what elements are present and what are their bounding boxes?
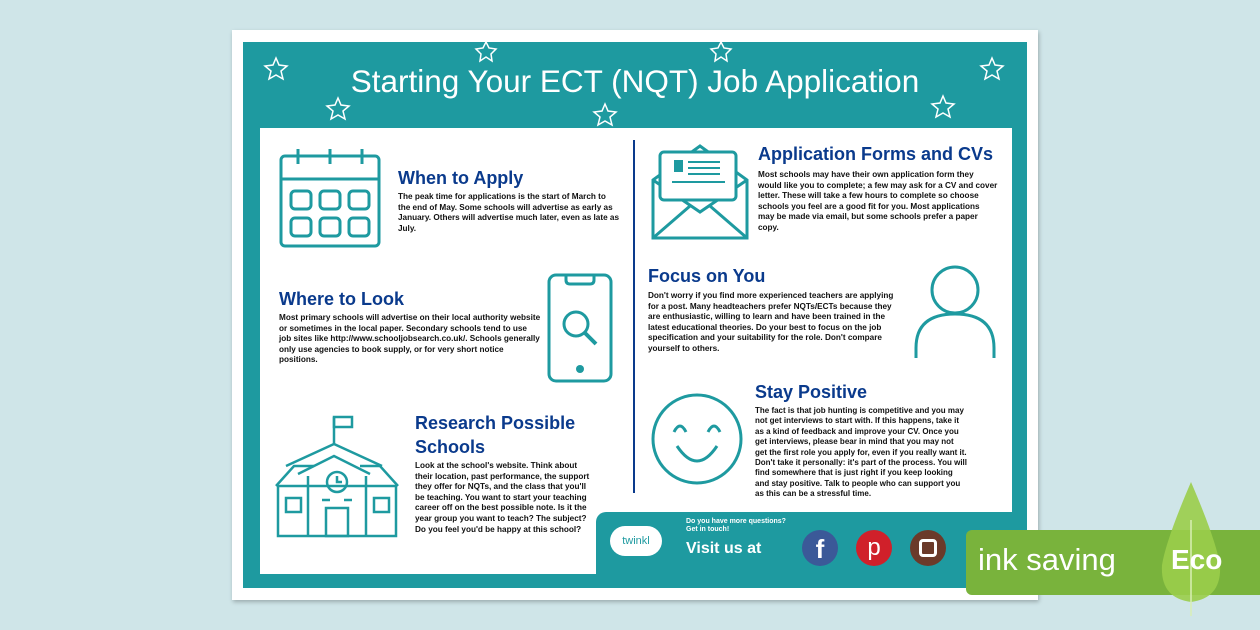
title: Starting Your ECT (NQT) Job Application [351, 63, 919, 99]
text: where to look: Most primary schools will advertise on their local authority website or sometimes in the local paper. Secondary schools tend to use job sites like http://www.schooljobsearch.co.uk/. Schools generally only use agencies to book supply, or for very short notice positions. [279, 313, 540, 364]
column divider [633, 140, 635, 493]
heading: Research Possible Schools: Research Possible Schools [415, 413, 575, 457]
eco badge: ink saving [978, 542, 1116, 577]
white content panel [260, 128, 1012, 574]
footer bar [596, 512, 1027, 588]
eco badge [966, 482, 1260, 616]
text: when to apply: The peak time for applications is the start of March to the end of May. Some schools will advertise as early as January. Others will advertise much later, even as late as July. [398, 192, 619, 233]
social icons [802, 530, 946, 566]
paper sheet [232, 30, 1038, 600]
footer: contact text: Get in touch! [686, 526, 729, 533]
social icons: f [816, 534, 824, 564]
footer: twinkl logo [610, 526, 662, 556]
footer: twinkl logo: twinkl [622, 535, 650, 547]
icon: phone search [548, 274, 612, 382]
eco badge: Eco [1171, 544, 1222, 575]
text: stay positive: The fact is that job hunting is competitive and you may not get interviews to start with. If this happens, take it as a kind of feedback and improve your CV. Once you get interviews, please bear in mind that you may not get the first role you apply for, even if you really want it. Don't take it personally: it's part of the process. You will find somewhere that is just right if you keep looking and stay positive. Talk to people who can support you as this can be a stressful time. [755, 406, 967, 498]
icon: person [914, 266, 996, 358]
heading: Focus on You: Focus on You [648, 266, 765, 286]
teal frame [243, 42, 1027, 588]
footer: contact text: Do you have more questions? [686, 518, 786, 525]
heading: Where to Look: Where to Look [279, 289, 404, 309]
text: research schools: Look at the school's website. Think about their location, past performance, the support they offer for NQTs, and the class that you'll be teaching. You want to start your teaching career off on the best possible note. Is it the year group you want to teach? The subject? Do you feel you'd be happy at this school? [415, 461, 589, 534]
footer: contact text: Visit us at [686, 540, 761, 557]
text: focus on you: Don't worry if you find more experienced teachers are applying for a post. Many headteachers prefer NQTs/ECTs because they are enthusiastic, willing to learn and have been trained in the latest educational theories. Do your best to focus on the job specification and your suitability for the role. Don't compare yourself to others. [648, 291, 893, 353]
icon: school building [275, 416, 399, 538]
icon: smiley [652, 394, 742, 484]
footer: contact text [686, 518, 786, 557]
stars decoration [263, 42, 1005, 126]
heading: When to Apply: When to Apply [398, 168, 523, 188]
text: application forms: Most schools may have their own application form they would like you to complete; a few may ask for a CV and cover letter. These will take a few hours to complete so choose schools you feel are a good fit for you. Most applications may be made via email, but some schools prefer a paper copy. [758, 170, 997, 232]
heading: Application Forms and CVs: Application Forms and CVs [758, 144, 993, 164]
social icons: p [867, 534, 881, 561]
heading: Stay Positive: Stay Positive [755, 382, 867, 402]
icon: calendar [280, 149, 380, 248]
icon: envelope [652, 144, 748, 240]
